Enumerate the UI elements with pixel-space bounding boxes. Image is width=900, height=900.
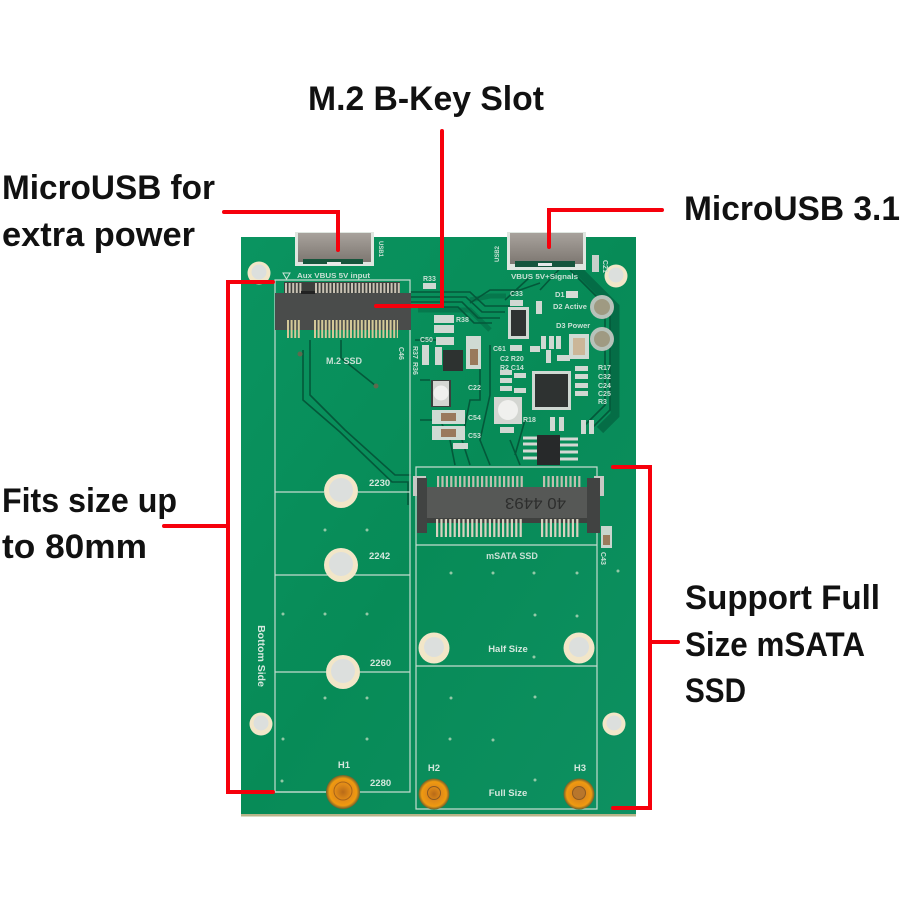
zone labels: 2242 (369, 551, 390, 562)
M.2 connector (275, 273, 411, 366)
heading: MicroUSB for extra power (2, 169, 215, 254)
USB connector: data: VBUS 5V+Signals (511, 272, 578, 281)
component designators: C21 (601, 260, 608, 273)
component designators: C54 (468, 415, 481, 422)
electronic components (397, 255, 614, 465)
component designators: C32 (598, 374, 611, 381)
M.2 connector: M.2 SSD (326, 356, 363, 366)
component designators: R2 C14 (500, 365, 524, 372)
component designators: R38 (456, 317, 469, 324)
heading: Support Full Size mSATA SSD: Size mSATA (685, 626, 865, 664)
M.2 zone silkscreen (275, 280, 410, 792)
heading: M.2 B-Key Slot: M.2 B-Key Slot (308, 80, 544, 118)
component designators: R3 (598, 399, 607, 406)
mounting holes (248, 262, 628, 736)
component designators: C2 R20 (500, 356, 524, 363)
heading: Support Full Size mSATA SSD: Support Full (685, 579, 880, 617)
zone labels: Bottom Side (255, 625, 267, 687)
chip U4 (443, 350, 463, 371)
component designators: C61 (493, 346, 506, 353)
USB connector: aux power (295, 232, 383, 280)
zone labels: 2260 (370, 658, 391, 669)
zone labels (255, 478, 586, 799)
heading: Fits size up to 80mm: Fits size up (2, 482, 177, 520)
component designators: C53 (468, 433, 481, 440)
component designators: R17 (598, 365, 611, 372)
dark circuit traces (298, 262, 615, 505)
LEDs and round pads (566, 255, 614, 351)
zone labels: Full Size (489, 788, 527, 799)
inductors (431, 380, 522, 424)
mSATA connector: C43 (599, 552, 606, 565)
zone labels: H2 (428, 763, 440, 774)
USB connector: data (495, 232, 586, 281)
component designators: R36 (411, 362, 418, 375)
zone labels: Half Size (488, 644, 528, 655)
heading: Support Full Size mSATA SSD (685, 579, 880, 710)
arrow: MicroUSB 3.1 callout line (549, 210, 662, 247)
heading: Fits size up to 80mm (2, 482, 177, 566)
zone labels: H3 (574, 763, 586, 774)
PCB board (241, 232, 636, 816)
component designators: R37 (411, 346, 418, 359)
heading: MicroUSB 3.1: MicroUSB 3.1 (684, 190, 900, 228)
mSATA zone silkscreen (416, 467, 597, 809)
small 8-pin chip (523, 435, 578, 465)
heading: MicroUSB for extra power: extra power (2, 216, 195, 254)
USB connector: aux power: Aux VBUS 5V input (297, 271, 371, 280)
zone labels: 2230 (369, 478, 390, 489)
tiny via dots (280, 528, 620, 782)
heading: MicroUSB for extra power: MicroUSB for (2, 169, 215, 207)
mSATA connector: 40 4493 (505, 494, 566, 511)
component designators: C50 (420, 337, 433, 344)
orange standoffs (326, 775, 594, 810)
chip U7 (508, 307, 529, 339)
component designators: C46 (397, 347, 404, 360)
capacitors (432, 334, 589, 440)
zone labels: 2280 (370, 778, 391, 789)
heading: Support Full Size mSATA SSD: SSD (685, 672, 746, 710)
USB connector: aux power: USB1 (377, 241, 383, 258)
mSATA connector (413, 476, 612, 565)
bracket: mSATA size (613, 467, 678, 808)
component designators: C24 (598, 383, 611, 390)
zone labels: H1 (338, 760, 351, 771)
component designators: D2 Active (553, 302, 587, 311)
component designators: R33 (423, 276, 436, 283)
component designators: R18 (523, 417, 536, 424)
component designators: D1 (555, 290, 565, 299)
mSATA connector: mSATA SSD (486, 551, 538, 561)
component designators: C25 (598, 391, 611, 398)
component designators (397, 260, 611, 440)
arrow: MicroUSB power callout line (224, 212, 338, 250)
main controller chip (532, 371, 571, 410)
component designators: C33 (510, 291, 523, 298)
USB connector: data: USB2 (495, 245, 501, 262)
component designators: C22 (468, 385, 481, 392)
arrow: M.2 slot callout line (376, 131, 442, 306)
component designators: D3 Power (556, 321, 590, 330)
bracket: M.2 length (164, 282, 273, 792)
heading: Fits size up to 80mm: to 80mm (2, 528, 147, 566)
resistors and small parts (422, 283, 594, 449)
